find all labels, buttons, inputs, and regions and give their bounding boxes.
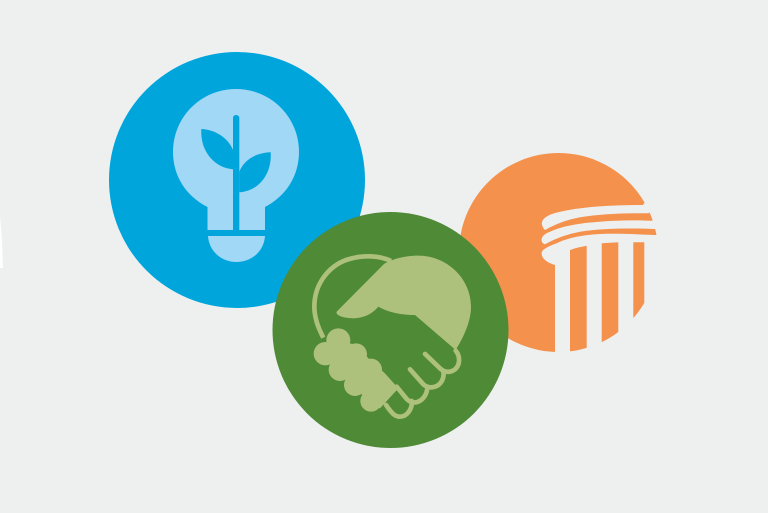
column capital middle band	[542, 218, 670, 244]
column capital upper band	[542, 195, 670, 230]
left leaf	[201, 129, 233, 169]
icon: blue light bulb circle	[109, 52, 365, 308]
bulb glass	[173, 89, 299, 230]
icon: green handshake circle	[272, 212, 508, 448]
plant stem	[233, 115, 239, 230]
bulb base	[208, 236, 265, 262]
arm ring	[314, 256, 391, 338]
column shaft and gaps	[542, 234, 670, 360]
right hand	[336, 256, 471, 350]
cuff	[314, 328, 398, 412]
icon: orange column circle	[459, 153, 670, 360]
fingers	[386, 351, 459, 417]
handshake symbol	[314, 256, 471, 417]
right leaf	[239, 152, 271, 192]
